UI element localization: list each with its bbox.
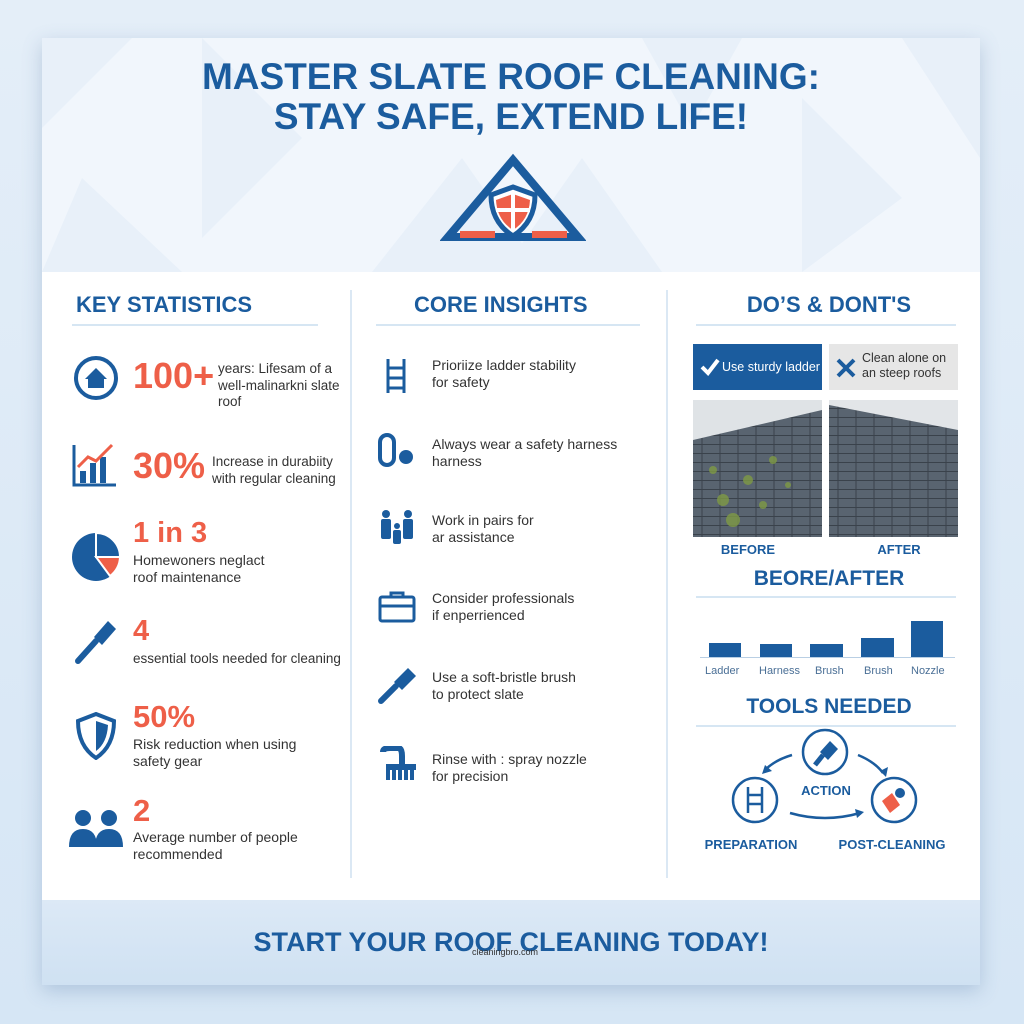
insight: pairs: [381, 510, 534, 544]
heading: key statistics: KEY STATISTICS: [76, 292, 252, 317]
photo: before: [693, 400, 822, 537]
stat: 100+: 100+: [133, 355, 214, 396]
stat: 2: recommended: [133, 846, 222, 862]
label: post-cleaning: POST-CLEANING: [839, 837, 945, 852]
insight: nozzle: [380, 746, 587, 784]
insight: brush: to protect slate: [432, 686, 524, 702]
title: STAY SAFE, EXTEND LIFE!: [274, 96, 748, 137]
stat: 100+: well-malinarkni slate: [218, 378, 340, 392]
heading: core insights: CORE INSIGHTS: [414, 292, 588, 317]
watermark: cleaningbro.com: [472, 947, 538, 957]
column dividers: [350, 290, 352, 878]
bar chart: Brush: [864, 665, 893, 677]
icon: roof shield logo: [440, 154, 586, 241]
stat: 2: [69, 793, 298, 862]
stat: 4: essential tools needed for cleaning: [133, 651, 341, 666]
stat: 100+: roof: [218, 394, 241, 409]
bar chart: Nozzle: [911, 665, 945, 677]
bar chart: Ladder: [705, 665, 739, 677]
label: action: ACTION: [801, 783, 851, 798]
insight: harness: harness: [432, 452, 482, 468]
insight: nozzle: Rinse with : spray nozzle: [432, 751, 587, 767]
stat: 2: 2: [133, 793, 150, 828]
photo: after: [829, 400, 958, 537]
title: [202, 56, 820, 137]
insight: harness: Always wear a safety harness: [432, 436, 617, 452]
label: before: BEFORE: [721, 542, 775, 557]
insight: professionals: [378, 590, 574, 623]
footer call to action: START YOUR ROOF CLEANING TODAY!: [253, 927, 769, 957]
stat: 50%: Risk reduction when using: [133, 736, 296, 752]
stat: 1 in 3: [72, 517, 265, 584]
stat: 2: Average number of people: [133, 829, 298, 845]
stat: 4: [75, 615, 341, 666]
label: preparation: PREPARATION: [705, 837, 797, 852]
bar chart: [700, 621, 955, 677]
insight: professionals: if enperrienced: [432, 606, 525, 622]
don't box: Clean alone on: [862, 351, 946, 365]
do box: [693, 344, 822, 390]
stat: 30%: [72, 444, 336, 486]
stat: 30%: 30%: [133, 445, 205, 486]
stat: 30%: with regular cleaning: [212, 470, 336, 486]
bar chart: Brush: [815, 665, 844, 677]
stat: 50%: [76, 699, 296, 769]
insight: nozzle: for precision: [432, 768, 508, 784]
stat: 4: 4: [133, 615, 149, 647]
heading: do's & donts: DO’S & DONT'S: [747, 292, 911, 317]
stat: 1 in 3: Homewoners neglact: [133, 552, 265, 568]
insight: ladder: Prioriize ladder stability: [432, 357, 576, 373]
do box: Use sturdy ladder: [722, 360, 820, 374]
stat: 100+: years: Lifesam of a: [218, 361, 332, 376]
insight: ladder: for safety: [432, 374, 490, 390]
footer band: [42, 900, 980, 985]
panel: do's and don'ts: [693, 292, 958, 852]
heading: beore/after: BEORE/AFTER: [754, 567, 904, 590]
insight: brush: [378, 668, 576, 704]
stat: 100+: [74, 355, 340, 409]
insight: harness: [378, 433, 617, 468]
stat: 50%: 50%: [133, 699, 195, 734]
insight: professionals: Consider professionals: [432, 590, 574, 606]
tools cycle diagram: [732, 728, 918, 824]
insight: ladder: [386, 357, 576, 393]
label: after: AFTER: [877, 542, 921, 557]
heading: tools needed: TOOLS NEEDED: [746, 695, 912, 718]
panel: core insights: [376, 292, 640, 784]
insight: pairs: ar assistance: [432, 528, 514, 544]
stat: 50%: safety gear: [133, 752, 202, 768]
panel: key statistics: [69, 292, 341, 862]
stat: 1 in 3: roof maintenance: [133, 568, 241, 584]
don't box: an steep roofs: [862, 366, 941, 380]
insight: brush: Use a soft-bristle brush: [432, 669, 576, 685]
don't box: [829, 344, 958, 390]
bar chart: Harness: [759, 665, 800, 677]
stat: 1 in 3: 1 in 3: [133, 517, 207, 549]
title: MASTER SLATE ROOF CLEANING:: [202, 56, 820, 97]
header background pattern: [42, 38, 980, 272]
insight: pairs: Work in pairs for: [432, 512, 534, 528]
stat: 30%: Increase in durabiity: [212, 454, 333, 469]
